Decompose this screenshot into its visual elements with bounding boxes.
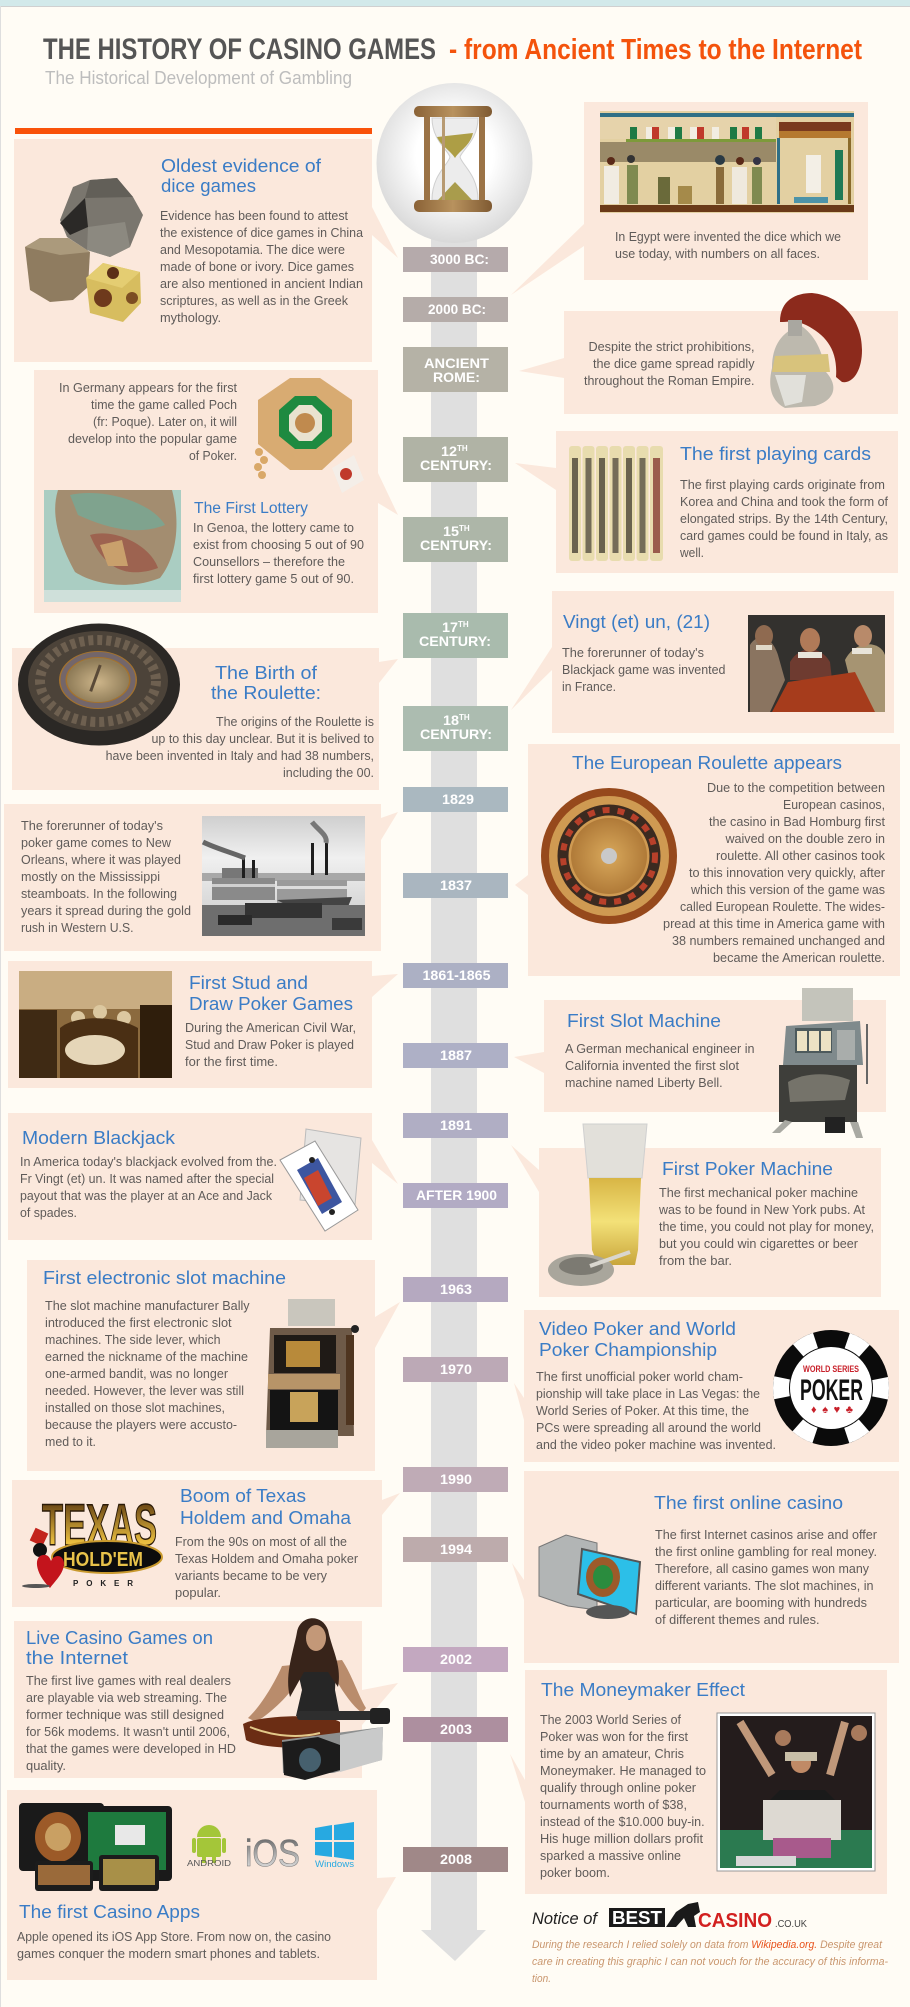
label: 12th century: 12 <box>441 443 457 459</box>
text: and the video poker machine was invented. <box>536 1438 776 1452</box>
text: The slot machine manufacturer Bally <box>45 1299 250 1313</box>
disclaimer: During the research I relied solely on data from Wikipedia.org. Despite great <box>532 1939 883 1951</box>
icon: Texas Hold'em logo <box>22 1493 162 1588</box>
text: The first playing cards originate from <box>680 478 885 492</box>
text <box>615 230 841 261</box>
text: During the American Civil War, <box>185 1021 356 1035</box>
text: the dice game spread rapidly <box>593 357 755 371</box>
label: 1994 <box>403 1537 508 1562</box>
label: 1837 <box>403 873 508 898</box>
label: 2003: 2003 <box>440 1721 472 1737</box>
label: 2002: 2002 <box>440 1651 472 1667</box>
text: qualify through online poker <box>540 1781 696 1795</box>
label: 17th century: 17 <box>442 619 458 635</box>
panel: first slot machine <box>514 988 886 1138</box>
text <box>663 781 886 965</box>
panel: oldest evidence of dice games <box>14 139 398 362</box>
icon: dice <box>25 178 143 322</box>
icon: Texas Hold'em logo: TEXAS <box>42 1493 157 1558</box>
label: 2003 <box>403 1717 508 1742</box>
heading: The First Lottery <box>194 500 308 517</box>
text <box>20 1155 277 1220</box>
icon: Android <box>187 1825 231 1868</box>
icon: Windows: Windows <box>315 1859 355 1869</box>
label: Ancient Rome: ANCIENT <box>424 355 489 371</box>
disclaimer <box>532 1939 888 1985</box>
text: up to this day unclear. But it is belived to <box>152 732 374 746</box>
heading <box>211 662 321 703</box>
text: World Series of Poker. At this time, the <box>536 1404 749 1418</box>
text: mythology. <box>160 311 221 325</box>
label: 15th century: 15 <box>443 523 459 539</box>
icon: Texas Hold'em logo: HOLD'EM <box>63 1549 143 1571</box>
text: particular, are booming with hundreds <box>655 1596 867 1610</box>
disclaimer: tion. <box>532 1973 551 1985</box>
heading <box>539 1318 736 1360</box>
panel: video poker and world poker championship <box>514 1310 899 1462</box>
image: Poch board <box>254 378 364 493</box>
text: was to be found in New York pubs. At <box>658 1203 866 1217</box>
text: are playable via web streaming. The <box>26 1691 227 1705</box>
image: antique roulette wheel <box>18 624 180 746</box>
text: European casinos, <box>783 798 885 812</box>
text: California invented the first slot <box>565 1059 740 1073</box>
icon: World Series of Poker chip <box>773 1330 889 1446</box>
timeline arrow <box>421 200 486 1961</box>
label: 1970 <box>403 1357 508 1382</box>
text: lottery: first lottery game 5 out of 90. <box>193 572 354 586</box>
title <box>43 33 862 66</box>
text: machines. The side lever, which <box>45 1333 221 1347</box>
text: Poch: of Poker. <box>189 449 237 463</box>
heading: The first Casino Apps <box>19 1901 200 1922</box>
text: 38 numbers remained unchanged and <box>672 934 885 948</box>
text: lottery <box>193 521 364 586</box>
text: Fr Vingt (et) un. It was named after the special <box>20 1172 274 1186</box>
text: med to it. <box>45 1435 96 1449</box>
text: of spades. <box>20 1206 77 1220</box>
label: Ancient Rome: ROME: <box>433 369 480 385</box>
panel: ancient Rome <box>519 293 898 414</box>
text: Poch: develop into the popular game <box>68 432 237 446</box>
text: the casino in Bad Homburg first <box>709 815 886 829</box>
label: 17th century: CENTURY: <box>419 633 491 649</box>
heading <box>161 155 322 196</box>
image: sepia poker photo <box>19 971 172 1078</box>
icon: Windows <box>315 1822 355 1869</box>
label: 1990: 1990 <box>440 1471 472 1487</box>
panel: poker on steamboats <box>4 804 398 951</box>
label: after 1900: AFTER 1900 <box>416 1187 497 1203</box>
text: which this version of the game was <box>690 883 885 897</box>
text: throughout the Roman Empire. <box>584 374 754 388</box>
text: The forerunner of today's <box>562 646 704 660</box>
heading: dice games <box>161 175 256 196</box>
text: The first mechanical poker machine <box>659 1186 858 1200</box>
notice logo: Notice of <box>532 1909 599 1928</box>
image: dealer with camera <box>243 1618 390 1780</box>
title: THE HISTORY OF CASINO GAMES <box>43 33 436 66</box>
text: mostly on the Mississippi <box>21 870 160 884</box>
text: time by an amateur, Chris <box>540 1747 684 1761</box>
image: ace and jack cards <box>280 1129 361 1231</box>
heading: Modern Blackjack <box>22 1127 176 1148</box>
text: of different themes and rules. <box>655 1613 820 1627</box>
text <box>562 646 726 694</box>
text: sparked a massive online <box>540 1849 681 1863</box>
text: In America today's blackjack evolved from the. <box>20 1155 277 1169</box>
panel: the Moneymaker effect <box>510 1670 887 1894</box>
text: Texas Holdem and Omaha poker <box>175 1552 358 1566</box>
text <box>160 209 363 325</box>
heading: Vingt (et) un, (21) <box>563 611 710 632</box>
label: 15th century <box>403 517 508 562</box>
image: Liberty Bell slot machine <box>772 988 868 1138</box>
text <box>17 1930 331 1961</box>
text: made of bone or ivory. Dice games <box>160 260 354 274</box>
heading: The European Roulette appears <box>572 752 842 773</box>
icon: computer with roulette <box>539 1535 640 1619</box>
heading: Holdem and Omaha <box>180 1507 352 1528</box>
text <box>658 1186 874 1268</box>
disclaimer: care in creating this graphic I can not vouch for the accuracy of this informa- <box>532 1956 888 1968</box>
text: Poch <box>59 381 238 463</box>
label: 1861-1865 <box>403 963 508 988</box>
label: 18th century: CENTURY: <box>420 726 492 742</box>
text: steamboats. In the following <box>21 887 177 901</box>
heading: Oldest evidence of <box>161 155 322 176</box>
heading: First electronic slot machine <box>43 1267 286 1288</box>
text: Poch: In Germany appears for the first <box>59 381 238 395</box>
text: are also mentioned in ancient Indian <box>160 277 363 291</box>
label: 1994: 1994 <box>440 1541 472 1557</box>
panel: first electronic slot machine <box>27 1260 400 1471</box>
label: 18th century <box>403 706 508 751</box>
text: rush in Western U.S. <box>21 921 134 935</box>
heading: The Moneymaker Effect <box>541 1679 745 1700</box>
text: different variants. The slot machines, in <box>655 1579 874 1593</box>
text: Therefore, all casino games won many <box>655 1562 870 1576</box>
label: 18th century: TH <box>459 713 470 722</box>
text <box>536 1370 776 1452</box>
text: for 56k modems. It wasn't until 2006, <box>26 1725 230 1739</box>
label: 15th century: CENTURY: <box>420 537 492 553</box>
label: 17th century <box>403 613 508 658</box>
heading: First Stud and <box>189 972 308 993</box>
label: 12th century: CENTURY: <box>420 457 492 473</box>
image: electronic slot machine <box>266 1299 359 1448</box>
icon: Texas Hold'em logo: POKER <box>73 1579 133 1588</box>
text <box>655 1528 877 1627</box>
text: popular. <box>175 1586 221 1600</box>
label: 1970: 1970 <box>440 1361 472 1377</box>
label: 1891: 1891 <box>440 1117 472 1133</box>
text: Evidence has been found to attest <box>160 209 349 223</box>
text: pread at this time in America game with <box>663 917 885 931</box>
panel: first casino apps <box>7 1790 396 1980</box>
text: poker game comes to New <box>21 836 172 850</box>
panel: first playing cards <box>515 431 898 573</box>
label: 1963 <box>403 1277 508 1302</box>
label: 17th century: TH <box>458 620 469 629</box>
text: variants became to be very <box>175 1569 328 1583</box>
text: and Mesopotamia. The dice were <box>160 243 345 257</box>
label: 1891 <box>403 1113 508 1138</box>
image: tablets and phones <box>19 1803 172 1891</box>
label: after 1900 <box>403 1183 508 1208</box>
panel: live casino games <box>14 1618 398 1780</box>
text: games conquer the modern smart phones and tablets. <box>17 1947 320 1961</box>
text: PCs were spreading all around the world <box>536 1421 761 1435</box>
heading: First Poker Machine <box>662 1158 833 1179</box>
text: called European Roulette. The wides- <box>680 900 885 914</box>
image: Moneymaker photo <box>717 1713 875 1871</box>
image: card players painting <box>748 615 885 712</box>
text: because the players were accusto- <box>45 1418 237 1432</box>
text: Korea and China and took the form of <box>680 495 889 509</box>
heading <box>189 972 353 1014</box>
text: the existence of dice games in China <box>160 226 363 240</box>
notice logo <box>532 1902 807 1932</box>
text: The first live games with real dealers <box>26 1674 231 1688</box>
image: roulette wheel <box>541 788 677 924</box>
text: introduced the first electronic slot <box>45 1316 232 1330</box>
image: Roman helmet <box>770 293 862 408</box>
panel: Poch and first lottery <box>34 370 398 613</box>
heading <box>26 1627 213 1668</box>
notice logo: .CO.UK <box>775 1919 807 1930</box>
label: 12th century: TH <box>457 444 468 453</box>
label: 12th century <box>403 437 508 482</box>
text: Poker was won for the first <box>540 1730 689 1744</box>
icon: World Series of Poker chip: POKER <box>800 1374 863 1407</box>
text: that the games were developed in HD <box>26 1742 236 1756</box>
text: Blackjack game was invented <box>562 663 726 677</box>
label: 1963: 1963 <box>440 1281 472 1297</box>
panel: boom of Texas Holdem and Omaha <box>12 1480 400 1607</box>
heading: the Roulette: <box>211 682 321 703</box>
text: Apple opened its iOS App Store. From now on, the casino <box>17 1930 331 1944</box>
text: well. <box>679 546 704 560</box>
text: lottery: Counsellors – therefore the <box>193 555 345 569</box>
text: The origins of the Roulette is <box>216 715 374 729</box>
panel: first poker machine <box>511 1124 881 1297</box>
text: card games could be found in Italy, as <box>680 529 888 543</box>
text: one-armed bandit, was no longer <box>45 1367 228 1381</box>
text <box>565 1042 755 1090</box>
text: lottery: In Genoa, the lottery came to <box>193 521 354 535</box>
text: poker boom. <box>540 1866 610 1880</box>
text <box>26 1674 236 1773</box>
heading: Video Poker and World <box>539 1318 736 1339</box>
text: The forerunner of today's <box>21 819 163 833</box>
image: elongated cards <box>569 446 663 561</box>
label: 2002 <box>403 1647 508 1672</box>
text <box>679 478 889 560</box>
panel: modern blackjack <box>8 1113 398 1240</box>
subtitle: The Historical Development of Gambling <box>45 68 352 88</box>
notice logo: CASINO <box>698 1910 772 1932</box>
label: 3000 BC <box>403 247 508 272</box>
text <box>540 1713 706 1880</box>
icon: iOS: iOS <box>245 1833 300 1875</box>
text: in France. <box>562 680 616 694</box>
text: have been invented in Italy and had 38 numbers, <box>106 749 374 763</box>
notice logo: BEST <box>612 1908 662 1928</box>
text: to this innovation very quickly, after <box>689 866 885 880</box>
panel: European roulette <box>515 744 900 976</box>
panel: birth of the roulette <box>12 624 398 790</box>
label: 1990 <box>403 1467 508 1492</box>
label: 1887 <box>403 1043 508 1068</box>
icon: hourglass <box>376 83 532 243</box>
timeline labels <box>403 247 508 1872</box>
text: for the first time. <box>185 1055 278 1069</box>
text: but you could win cigarettes or beer <box>659 1237 858 1251</box>
text: Orleans, where it was played <box>21 853 181 867</box>
heading: First Slot Machine <box>567 1010 721 1031</box>
text: Due to the competition between <box>707 781 885 795</box>
text: from the bar. <box>659 1254 732 1268</box>
text: became the American roulette. <box>713 951 885 965</box>
label: 18th century: 18 <box>443 712 459 728</box>
text: waived on the double zero in <box>724 832 885 846</box>
text: In Egypt were invented the dice which we <box>615 230 841 244</box>
text: needed. However, the lever was still <box>45 1384 244 1398</box>
panel: Egypt <box>511 102 868 295</box>
image: beer and ashtray <box>548 1124 647 1286</box>
heading: Live Casino Games on <box>26 1627 213 1648</box>
text: A German mechanical engineer in <box>565 1042 755 1056</box>
text: The first unofficial poker world cham- <box>536 1370 743 1384</box>
panel: first stud and draw poker games <box>8 961 398 1088</box>
icon: World Series of Poker chip: ♦♠♥♣ <box>811 1404 853 1416</box>
heading: Poker Championship <box>539 1339 717 1360</box>
icon: Android: ANDROID <box>187 1859 231 1868</box>
label: 1887: 1887 <box>440 1047 472 1063</box>
image: Egyptian papyrus <box>600 111 854 213</box>
text: earned the nickname of the machine <box>45 1350 248 1364</box>
text <box>21 819 191 935</box>
text: Moneymaker. He managed to <box>540 1764 706 1778</box>
heading: the Internet <box>26 1647 128 1668</box>
text: payout that was the player at an Ace and Jack <box>20 1189 273 1203</box>
label: 1861-1865: 1861-1865 <box>422 967 491 983</box>
label: 1829 <box>403 787 508 812</box>
heading: Boom of Texas <box>180 1485 306 1506</box>
label: 1837: 1837 <box>440 877 472 893</box>
text: tournaments worth of $38, <box>540 1798 687 1812</box>
label: 2008: 2008 <box>440 1851 472 1867</box>
heading: The first playing cards <box>680 443 871 464</box>
heading: The first online casino <box>654 1492 843 1513</box>
text: From the 90s on most of all the <box>175 1535 347 1549</box>
image: steamboats photo <box>202 816 365 936</box>
text <box>175 1535 358 1600</box>
text: the time, you could not play for money, <box>659 1220 874 1234</box>
text: Stud and Draw Poker is played <box>185 1038 354 1052</box>
text: installed on those slot machines, <box>45 1401 225 1415</box>
text: including the 00. <box>283 766 374 780</box>
text <box>106 715 374 780</box>
panel: first online casino <box>512 1471 899 1663</box>
text: Despite the strict prohibitions, <box>588 340 754 354</box>
text: machine named Liberty Bell. <box>565 1076 723 1090</box>
icon: World Series of Poker chip: WORLD SERIES <box>803 1364 859 1374</box>
text <box>45 1299 250 1449</box>
text: The 2003 World Series of <box>540 1713 682 1727</box>
text: the first online gambling for real money. <box>655 1545 877 1559</box>
text: His huge million dollars profit <box>540 1832 704 1846</box>
text: use today, with numbers on all faces. <box>615 247 820 261</box>
image: map of Genoa <box>44 490 181 602</box>
text: years it spread during the gold <box>21 904 191 918</box>
text: instead of the $10.000 buy-in. <box>540 1815 705 1829</box>
panel: Vingt et un <box>511 591 894 733</box>
label: Ancient Rome <box>403 347 508 392</box>
heading: The Birth of <box>215 662 318 683</box>
label: 2008 <box>403 1847 508 1872</box>
text <box>584 340 755 388</box>
text: Poch: (fr: Poque). Later on, it will <box>93 415 237 429</box>
text: roulette. All other casinos took <box>716 849 886 863</box>
text: quality. <box>26 1759 66 1773</box>
label: 15th century: TH <box>459 524 470 533</box>
label: 2000 BC: 2000 BC: <box>428 301 486 317</box>
label: 1829: 1829 <box>442 791 474 807</box>
text: former technique was still designed <box>26 1708 224 1722</box>
heading <box>180 1485 352 1528</box>
text: The first Internet casinos arise and offer <box>655 1528 877 1542</box>
accent bar <box>15 128 372 134</box>
text: Poch: time the game called Poch <box>91 398 237 412</box>
text <box>185 1021 356 1069</box>
text: elongated strips. By the 14th Century, <box>680 512 888 526</box>
heading: Draw Poker Games <box>189 993 353 1014</box>
text: pionship will take place in Las Vegas: the <box>536 1387 760 1401</box>
text: scriptures, as well as in the Greek <box>160 294 349 308</box>
label: 2000 BC <box>403 297 508 322</box>
label: 3000 BC: 3000 BC: <box>430 251 489 267</box>
text: lottery: exist from choosing 5 out of 90 <box>193 538 364 552</box>
